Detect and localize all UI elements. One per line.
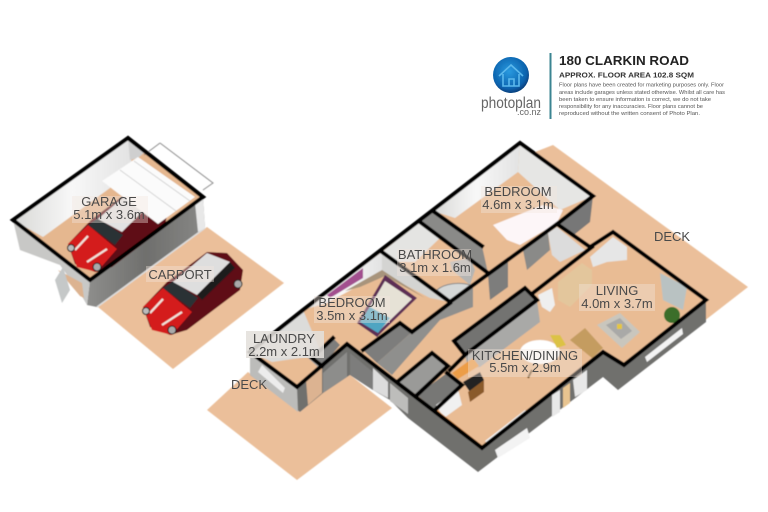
header: company logo: photoplan — [481, 95, 541, 112]
room label: kitchen dining — [468, 348, 582, 377]
garage walls outline — [13, 138, 203, 280]
lower left deck — [207, 372, 392, 480]
carport floor — [98, 227, 284, 369]
room label: living: LIVING — [596, 283, 638, 298]
room label: garage — [72, 194, 148, 223]
house exterior walls — [250, 196, 706, 472]
header: company logo — [481, 57, 541, 117]
garage interior — [13, 138, 203, 280]
header: address and disclaimer: areas include garages unless stated otherwise. Whilst all care has — [559, 90, 725, 96]
house walls outline — [250, 143, 706, 448]
furniture: shower — [437, 283, 470, 300]
room label: garage: 5.1m x 3.6m — [73, 207, 145, 222]
room label: laundry — [246, 331, 324, 359]
room label: main bedroom — [481, 184, 557, 213]
room label: carport: CARPORT — [148, 267, 212, 282]
room label: living — [579, 283, 655, 311]
room label: main bedroom: BEDROOM — [484, 184, 552, 199]
garage exterior walls — [13, 197, 205, 307]
car in carport — [142, 252, 243, 335]
garage door panels — [102, 143, 213, 224]
garage and carport unit — [13, 138, 284, 369]
room label: garage: GARAGE — [81, 194, 137, 209]
furniture: bedroom bed — [493, 205, 563, 245]
room label: main bedroom: 4.6m x 3.1m — [482, 197, 554, 212]
room label: laundry: LAUNDRY — [253, 331, 315, 346]
header: address and disclaimer: been taken to ensure information is correct, we do not take — [559, 97, 711, 103]
room label: laundry: 2.2m x 2.1m — [248, 344, 320, 359]
header: address and disclaimer — [550, 53, 725, 119]
furniture: living room — [558, 263, 680, 358]
room label: kitchen dining: 5.5m x 2.9m — [489, 360, 561, 375]
room label: bedroom two — [314, 295, 390, 323]
header: company logo: .co.nz — [517, 107, 541, 117]
header: address and disclaimer: Floor plans have been created for marketing purposes only. Floor — [559, 82, 724, 88]
furniture: dining table — [520, 335, 566, 378]
right deck — [535, 145, 748, 332]
label: lower deck: DECK — [231, 377, 267, 392]
car in garage — [68, 189, 168, 272]
header: address and disclaimer: 180 CLARKIN ROAD — [559, 54, 689, 68]
room label: living: 4.0m x 3.7m — [581, 296, 653, 311]
furniture: kitchen — [435, 358, 527, 449]
room label: kitchen dining: KITCHEN/DINING — [472, 348, 578, 363]
room label: bathroom: 3.1m x 1.6m — [399, 260, 471, 275]
room label: bathroom — [397, 247, 472, 276]
house floor — [250, 143, 706, 448]
header: address and disclaimer: APPROX. FLOOR AREA 102.8 SQM — [559, 70, 694, 80]
room label: bathroom: BATHROOM — [398, 247, 472, 262]
label: right deck: DECK — [654, 229, 690, 244]
main house — [207, 143, 748, 480]
header: address and disclaimer: reproduced without the written consent of Photo Plan. — [559, 111, 700, 117]
room label: bedroom two: 3.5m x 3.1m — [316, 308, 388, 323]
header: address and disclaimer: responsibility for any inaccuracies. Floor plans cannot be — [559, 104, 703, 110]
walls: interior faces — [250, 143, 687, 418]
furniture: bedroom two bed — [327, 268, 417, 337]
room label: bedroom two: BEDROOM — [318, 295, 386, 310]
